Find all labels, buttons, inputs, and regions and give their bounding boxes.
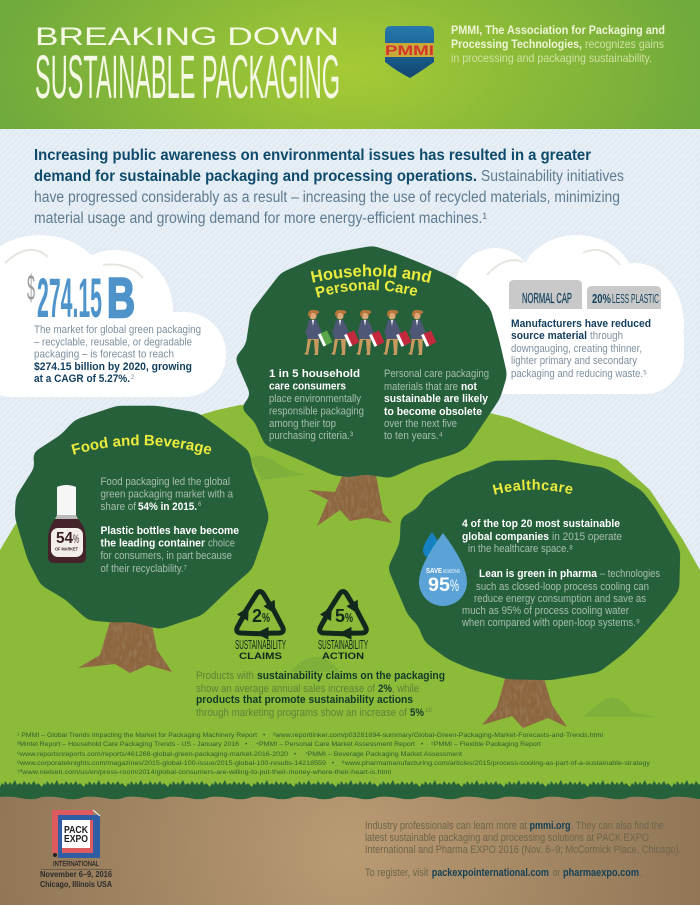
heading: Household and Personal Care: Personal Care (315, 279, 418, 298)
footnotes: • (245, 741, 247, 748)
footnotes: ⁴PMMI – Personal Care Market Assessment Report (256, 741, 415, 748)
footnotes: • (294, 751, 296, 758)
icon: recycling 5% sustainability action (312, 592, 374, 661)
icon: reduced cap: 20% (592, 292, 611, 306)
text: consumers: place environmentally (269, 393, 361, 405)
logo: PACK EXPO International: EXPO (64, 833, 88, 845)
icon: bottle 54% of market: % (73, 532, 79, 546)
title (35, 23, 340, 111)
panel: Household and Personal Care tree (236, 246, 507, 478)
text: healthcare facts: such as closed-loop process cooling can (476, 581, 649, 593)
icon: recycling 5% sustainability action: ACTION (322, 651, 364, 661)
text: consumers: 1 in 5 household (269, 368, 360, 380)
source reduction text (511, 318, 651, 380)
footnotes (17, 732, 651, 776)
icon: bottle 54% of market: OF MARKET (55, 546, 78, 552)
source reduction text: Manufacturers have reduced (511, 318, 651, 330)
source reduction text: source material (511, 330, 587, 342)
text: healthcare facts: in 2015 operate (552, 531, 622, 543)
text: obsolete materials: sustainable are likely (384, 393, 489, 405)
icon: recycling 5% sustainability action: % (345, 610, 353, 625)
text: consumers: care consumers (269, 380, 346, 392)
heading: Household and Personal Care (310, 264, 432, 298)
intro text: have progressed considerably as a result – increasing the use of recycled materials, minimizing (34, 189, 620, 206)
text: learn more and register: Industry professionals can learn more at (365, 820, 528, 832)
icon: recycling 2% sustainability claims (229, 592, 291, 661)
footnotes: • (332, 760, 334, 767)
text: consumers: among their top (269, 418, 336, 430)
footnotes: ¹ PMMI – Global Trends Impacting the Market for Packaging Machinery Report (17, 732, 257, 739)
panel: Food and Beverage tree (14, 406, 268, 628)
text: sustainability claims: 5% (410, 707, 424, 719)
heading: Healthcare: Healthcare (492, 479, 572, 495)
source reduction text: downgauging, creating thinner, (511, 343, 642, 355)
market text: at a CAGR of 5.27%. (34, 373, 130, 385)
icon: water drops save 95%: % (450, 576, 459, 595)
intro text (34, 147, 624, 227)
soil footer (0, 790, 700, 905)
text: sustainability claims: 2% (378, 683, 392, 695)
header description: in processing and packaging sustainability. (451, 51, 652, 65)
header band (0, 0, 700, 129)
big figure: $274.15B: B (107, 266, 135, 329)
icon: bottle 54% of market (48, 485, 86, 563)
icon: recycling 2% sustainability claims: 2 (252, 606, 262, 626)
text: healthcare facts: – technologies (600, 568, 660, 580)
text: sustainability claims: , while (392, 683, 419, 695)
text: sustainability claims (196, 670, 445, 719)
big figure: $274.15B (27, 266, 135, 329)
text: consumers: purchasing criteria.³ (269, 430, 353, 442)
text: food packaging: of their recyclability.⁷ (100, 563, 187, 575)
text: sustainability claims: Products with (196, 670, 254, 682)
heading: Household and Personal Care: Household and (310, 264, 432, 283)
text: food packaging: choice (208, 538, 235, 550)
heading: Food and Beverage: Food and Beverage (71, 434, 212, 455)
text: obsolete materials: to become obsolete (384, 406, 482, 418)
source reduction text: lighter primary and secondary (511, 355, 637, 367)
title: BREAKING DOWN (35, 23, 339, 51)
text: food packaging: Food packaging led the global (100, 476, 230, 488)
icon: recycling 5% sustainability action: 5 (335, 606, 345, 626)
text: healthcare facts: 4 of the top 20 most sustainable (462, 518, 620, 530)
logo: PACK EXPO International (40, 810, 113, 889)
market text: $274.15 billion by 2020, growing (34, 361, 192, 373)
text: learn more and register (365, 820, 681, 879)
intro text: demand for sustainable packaging and processing operations. (34, 168, 477, 185)
text: food packaging: for consumers, in part because (100, 550, 232, 562)
text: learn more and register: . They can also find the (571, 820, 664, 832)
text: obsolete materials: Personal care packaging (384, 368, 489, 380)
text: healthcare facts: global companies (462, 531, 549, 543)
header description: recognizes gains (585, 37, 664, 51)
text: healthcare facts: Lean is green in pharma (479, 568, 598, 580)
text: food packaging: share of (100, 501, 137, 513)
text: learn more and register: . (640, 867, 643, 879)
text: sustainability claims: 10 (425, 708, 432, 714)
icon: reduced cap: LESS PLASTIC (612, 292, 659, 306)
icon: recycling 2% sustainability claims: CLAIMS (239, 651, 282, 661)
text: food packaging: 6 (198, 502, 202, 508)
footnotes: ¹⁰www.nielsen.com/us/en/press-room/2014/global-consumers-are-willing-to-put-their-money-where-their-heart-is.html (17, 769, 391, 776)
icon: water drops save 95%: AS MUCH AS (443, 569, 460, 575)
text: healthcare facts: when compared with open-loop systems.⁹ (461, 617, 640, 629)
market text (34, 324, 201, 385)
intro text: Increasing public awareness on environmental issues has resulted in a greater (34, 147, 591, 164)
logo: PACK EXPO International: November 6–9, 2016 (40, 870, 113, 879)
market text: The market for global green packaging (34, 324, 201, 336)
text: learn more and register: or (553, 867, 560, 879)
footnotes: ³Mintel Report – Household Care Packaging Trends - US - January 2016 (17, 741, 239, 748)
footnotes: ²www.reportlinker.com/p03281894-summary/Global-Green-Packaging-Market-Forecasts-and-Trends.html (273, 732, 603, 739)
footnotes: ⁸www.corporateknights.com/magazines/2015-global-100-issue/2015-global-100-results-14218559 (17, 760, 326, 767)
text: sustainability claims: products that promote sustainability actions (196, 694, 413, 706)
header description: PMMI, The Association for Packaging and (451, 23, 665, 37)
grass strip (0, 779, 700, 803)
footnotes: • (421, 741, 423, 748)
text: food packaging: Plastic bottles have become (100, 525, 239, 537)
text: learn more and register: packexpointernational.com (432, 867, 549, 879)
icon: water drops save 95% (419, 532, 467, 606)
source reduction text: packaging and reducing waste.⁵ (511, 368, 647, 380)
icon: normal cap: NORMAL CAP (522, 290, 572, 307)
panel: left cloud (0, 235, 226, 397)
logo: PACK EXPO International: INTERNATIONAL (53, 859, 99, 868)
footnotes: ⁷PMMI – Beverage Packaging Market Assessment (305, 751, 462, 758)
icon: normal cap (509, 280, 582, 309)
icon: PMMI shield logo: PMMI (385, 43, 434, 58)
icon: five shoppers (304, 310, 436, 355)
text: sustainability claims: sustainability claims on the packaging (257, 670, 445, 682)
header description: Processing Technologies, (451, 37, 582, 51)
source reduction text: through (590, 330, 623, 342)
footnotes: • (263, 732, 265, 739)
icon: recycling 2% sustainability claims: % (262, 610, 270, 625)
header description (451, 23, 665, 65)
text: healthcare facts: reduce energy consumption and save as (474, 593, 646, 605)
tree trunks (78, 470, 567, 728)
footnotes: ⁶www.reportsnreports.com/reports/461268-global-green-packaging-market-2016-2020 (17, 751, 288, 758)
icon: recycling 5% sustainability action: SUSTAINABILITY (318, 638, 368, 652)
text: food packaging: green packaging market with a (100, 488, 234, 500)
logo: PACK EXPO International: PACK (64, 824, 88, 836)
big figure: $274.15B: $ (27, 267, 35, 308)
text: food packaging (100, 476, 239, 575)
text: learn more and register: pharmaexpo.com (563, 867, 639, 879)
text: food packaging: the leading container (100, 538, 206, 550)
text: food packaging: 54% in 2015. (138, 501, 197, 513)
text: obsolete materials (384, 368, 489, 442)
intro text: material usage and growing demand for more energy-efficient machines.¹ (34, 210, 487, 227)
text: sustainability claims: through marketing programs show an increase of (196, 707, 408, 719)
text: consumers (269, 368, 364, 442)
icon: recycling 2% sustainability claims: SUSTAINABILITY (235, 638, 286, 652)
text: obsolete materials: to ten years.⁴ (384, 430, 443, 442)
panel: Healthcare tree (389, 460, 680, 680)
text: obsolete materials: not (461, 381, 477, 393)
market text: 2 (131, 375, 135, 381)
text: sustainability claims: show an average annual sales increase of (196, 683, 376, 695)
footnotes: ⁹www.pharmamanufacturing.com/articles/2015/process-cooling-as-part-of-a-sustainable-strategy (342, 760, 651, 767)
icon: reduced cap (587, 286, 661, 309)
panel: right cloud (453, 235, 684, 394)
big figure: $274.15B: 274.15 (37, 266, 102, 329)
icon: water drops save 95%: 95 (428, 575, 450, 596)
text: obsolete materials: over the next five (384, 418, 457, 430)
market text: – recyclable, reusable, or degradable (34, 336, 192, 348)
text: learn more and register: pmmi.org (530, 820, 571, 832)
text: learn more and register: To register, visit (365, 867, 429, 879)
text: consumers: responsible packaging (269, 406, 364, 418)
text: healthcare facts: much as 95% of process cooling water (462, 605, 629, 617)
text: healthcare facts: in the healthcare space.⁸ (468, 543, 573, 555)
intro text: Sustainability initiatives (481, 168, 624, 185)
green hill (0, 400, 700, 795)
icon: water drops save 95%: SAVE (426, 568, 442, 575)
logo: PACK EXPO International: Chicago, Illinois USA (40, 880, 112, 889)
icon: bottle 54% of market: 54 (56, 530, 73, 547)
icon: PMMI shield logo (385, 26, 434, 78)
footnotes: ⁵PMMI – Flexible Packaging Report (431, 741, 541, 748)
text: obsolete materials: materials that are (384, 381, 458, 393)
text: healthcare facts (461, 518, 660, 629)
market text: packaging – is forecast to reach (34, 348, 174, 360)
